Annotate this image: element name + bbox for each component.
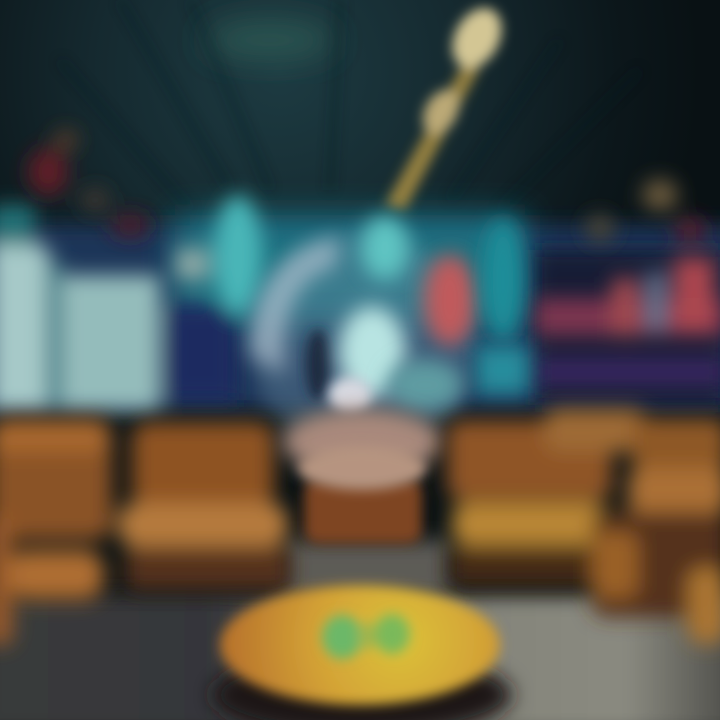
ceiling sign glow: [205, 20, 335, 60]
table: [212, 585, 512, 720]
right sofas: [447, 408, 720, 644]
middle band: backdrop: [0, 215, 720, 410]
floor: [0, 540, 720, 720]
ceiling rays: [60, 0, 640, 210]
central pedestal: [282, 408, 442, 544]
glass orb: [250, 216, 530, 457]
gold diagonal beam: [385, 0, 511, 210]
left pale panels: [0, 195, 262, 410]
left sofas: [0, 418, 290, 645]
red and gold lights left: [28, 130, 150, 237]
right stage lights and bands: [535, 179, 720, 386]
icon: green glow on table: [322, 614, 410, 659]
